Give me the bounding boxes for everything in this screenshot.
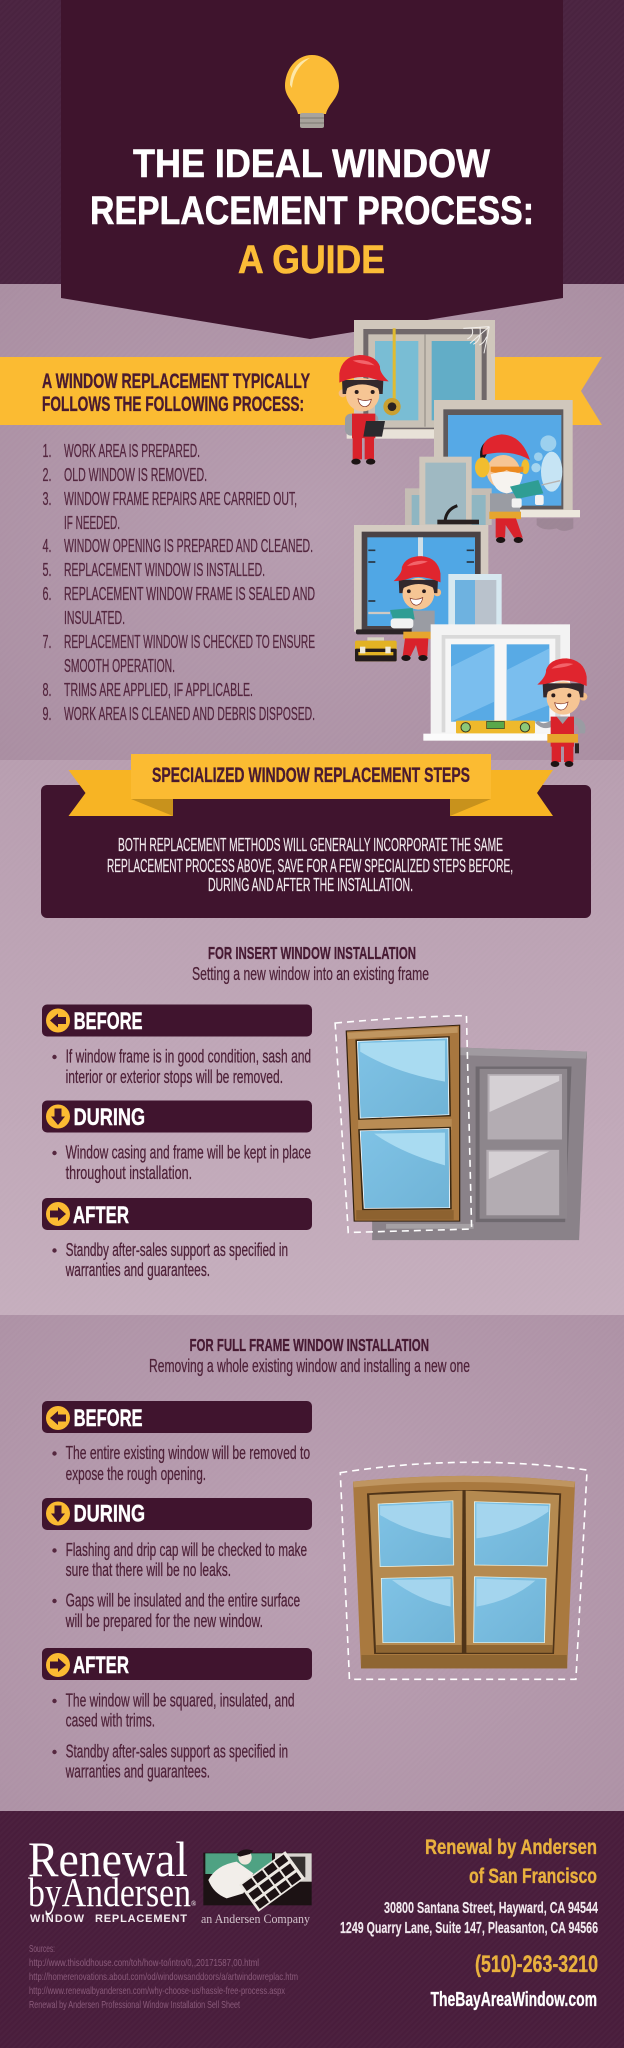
text block: numbered process list: REPLACEMENT WINDOW FRAME IS SEALED AND	[64, 584, 315, 604]
text block: sources	[29, 1943, 298, 2011]
logo: Renewal by Andersen wordmark: ®	[191, 1900, 197, 1908]
text block: full frame after bullets: Standby after-sales support as specified in	[66, 1742, 288, 1762]
text block: numbered process list: 6.	[42, 584, 52, 604]
window: translucent new sash	[448, 574, 502, 626]
heading: insert window installation: Setting a new window into an existing frame	[192, 964, 429, 984]
text block: full frame during bullets: will be prepared for the new window.	[65, 1611, 263, 1631]
illustration: windows and workers, upper group	[339, 320, 580, 543]
text block: full frame during bullets: sure that there will be no leaks.	[66, 1560, 231, 1580]
text block: full frame before bullet: expose the rough opening.	[66, 1464, 206, 1484]
text block: full frame after bullets: The window will be squared, insulated, and	[66, 1691, 295, 1711]
text block: sources: http://homerenovations.about.com/od/windowsanddoors/a/artwindowreplac.htm	[29, 1971, 298, 1983]
logo: man carrying window	[203, 1849, 312, 1912]
logo: Renewal by Andersen wordmark: byAndersen	[28, 1869, 191, 1915]
text block: numbered process list: REPLACEMENT WINDOW IS CHECKED TO ENSURE	[64, 632, 315, 652]
ribbon: specialized steps heading: SPECIALIZED WINDOW REPLACEMENT STEPS	[152, 764, 470, 787]
text block: insert during bullet	[52, 1142, 311, 1183]
window: grey existing frame	[372, 1048, 587, 1240]
text block: addresses	[340, 1900, 598, 1937]
icon: down arrow	[46, 1104, 70, 1128]
text block: full frame after bullets	[52, 1691, 295, 1782]
character: worker with goggles and drill	[475, 434, 560, 543]
ribbon heading: FOLLOWS THE FOLLOWING PROCESS:	[42, 393, 304, 416]
panel: insert during	[42, 1100, 312, 1132]
window: stacked spare frames	[405, 457, 492, 525]
text block: sources: http://www.renewalbyandersen.com/why-choose-us/hassle-free-process.aspx	[29, 1985, 286, 1997]
ribbon: specialized steps heading	[68, 754, 553, 816]
text block: full frame during bullets	[52, 1540, 307, 1631]
logo: Renewal by Andersen wordmark: Renewal	[28, 1831, 188, 1887]
logo: Renewal by Andersen wordmark: an Andersen Company	[201, 1911, 310, 1926]
panel: full frame during	[42, 1498, 312, 1530]
panel: specialized steps intro	[41, 754, 591, 918]
background: specialized steps section	[0, 760, 624, 1315]
logo: Renewal by Andersen wordmark: WINDOW	[30, 1913, 85, 1925]
text block: numbered process list: WINDOW FRAME REPAIRS ARE CARRIED OUT,	[64, 489, 297, 509]
title: THE IDEAL WINDOW	[133, 142, 490, 186]
text block: numbered process list: 7.	[42, 632, 52, 652]
window: old window with cobweb	[347, 320, 495, 439]
background: top band	[0, 0, 624, 284]
panel: full frame after: AFTER	[73, 1652, 129, 1679]
text block: numbered process list: INSULATED.	[64, 608, 125, 628]
title	[90, 142, 534, 282]
text block: insert after bullet: warranties and guarantees.	[65, 1260, 210, 1280]
character: worker drilling	[368, 556, 441, 661]
text block: numbered process list: 1.	[42, 441, 52, 461]
text block: numbered process list: REPLACEMENT WINDOW IS INSTALLED.	[64, 560, 265, 580]
text block: numbered process list: WINDOW OPENING IS PREPARED AND CLEANED.	[64, 536, 313, 556]
heading: insert window installation: FOR INSERT WINDOW INSTALLATION	[208, 943, 416, 963]
text block: full frame before bullet: The entire existing window will be removed to	[66, 1443, 310, 1463]
text block: insert during bullet: Window casing and frame will be kept in place	[66, 1142, 311, 1162]
illustration: full frame wooden window	[340, 1462, 587, 1679]
icon: right arrow	[46, 1202, 70, 1226]
character: worker with tablet and tape	[339, 355, 401, 465]
window: four glass panes	[378, 1501, 550, 1643]
text block: full frame before bullet	[52, 1443, 310, 1484]
panel: insert after	[42, 1198, 312, 1230]
text block: numbered process list: WORK AREA IS PREPARED.	[64, 441, 200, 461]
panel: title banner	[61, 0, 563, 339]
footer panel	[28, 1831, 598, 2011]
text block: numbered process list: 9.	[42, 704, 52, 724]
background: footer	[0, 1811, 624, 2048]
text block: numbered process list: 3.	[42, 489, 52, 509]
panel: full frame before	[42, 1401, 312, 1433]
icon: left arrow	[46, 1406, 70, 1430]
text block: sources: Sources:	[29, 1943, 55, 1955]
text block: sources: http://www.thisoldhouse.com/toh/how-to/intro/0,,20171587,00.html	[29, 1957, 259, 1969]
panel: full frame before: BEFORE	[74, 1405, 143, 1432]
text block: numbered process list: OLD WINDOW IS REMOVED.	[64, 465, 207, 485]
logo: Renewal by Andersen wordmark: REPLACEMENT	[95, 1913, 187, 1925]
window: finished white window	[423, 624, 570, 741]
window: prepared opening	[354, 525, 488, 634]
illustration: insert window being placed into grey frame	[335, 1016, 587, 1240]
text block: intro paragraph	[107, 835, 513, 895]
icon: left arrow	[46, 1008, 70, 1032]
text block: numbered process list: TRIMS ARE APPLIED, IF APPLICABLE.	[64, 680, 253, 700]
text block: company name	[425, 1836, 597, 1888]
background: full frame section	[0, 1315, 624, 1812]
title: A GUIDE	[238, 238, 385, 282]
panel: full frame during: DURING	[74, 1501, 145, 1528]
icon: toolbox	[355, 637, 397, 661]
text block: full frame after bullets: warranties and guarantees.	[65, 1762, 210, 1782]
text block: full frame after bullets: cased with trims.	[66, 1711, 155, 1731]
panel: insert after: AFTER	[73, 1202, 129, 1229]
illustration: windows and workers, lower group	[354, 525, 587, 767]
panel: insert during: DURING	[74, 1104, 145, 1131]
character: smiling worker with level	[535, 658, 587, 767]
text block: numbered process list: 8.	[42, 680, 52, 700]
text block: sources: Renewal by Andersen Professional Window Installation Sell Sheet	[29, 1999, 240, 2011]
ribbon heading: A WINDOW REPLACEMENT TYPICALLY	[42, 370, 310, 393]
heading: insert window installation	[192, 943, 429, 984]
panel: insert before: BEFORE	[74, 1008, 143, 1035]
window: wooden frame	[353, 1476, 575, 1668]
text block: full frame during bullets: Gaps will be insulated and the entire surface	[66, 1591, 300, 1611]
text block: numbered process list: 5.	[42, 560, 52, 580]
text block: numbered process list: 4.	[42, 536, 52, 556]
text block: insert during bullet: throughout installation.	[66, 1163, 192, 1183]
panel: insert before	[42, 1004, 312, 1036]
window: brown insert sash	[346, 1025, 460, 1221]
icon: light bulb	[285, 55, 339, 128]
icon: spirit level	[456, 721, 535, 733]
text block: insert before bullet: interior or exterior stops will be removed.	[66, 1067, 283, 1087]
window: drilling window with foam	[434, 400, 580, 531]
dashed selection outline	[340, 1462, 587, 1679]
icon: down arrow	[46, 1502, 70, 1526]
text block: insert after bullet	[52, 1240, 288, 1280]
heading: full frame window installation	[149, 1335, 470, 1376]
title: REPLACEMENT PROCESS:	[90, 189, 534, 233]
text block: numbered process list: IF NEEDED.	[64, 513, 120, 533]
text block: full frame during bullets: Flashing and drip cap will be checked to make	[66, 1540, 307, 1560]
logo: Renewal by Andersen wordmark	[28, 1831, 310, 1926]
dashed selection outline	[335, 1016, 472, 1232]
ribbon heading	[42, 370, 310, 416]
text block: numbered process list: 2.	[42, 465, 52, 485]
background: process section	[0, 284, 624, 760]
text block: insert before bullet: If window frame is in good condition, sash and	[66, 1046, 311, 1066]
panel: full frame after	[42, 1648, 312, 1680]
text block: numbered process list	[42, 441, 315, 724]
heading: full frame window installation: Removing a whole existing window and installing a new one	[149, 1356, 470, 1376]
text block: insert after bullet: Standby after-sales support as specified in	[66, 1240, 288, 1260]
text block: intro paragraph: DURING AND AFTER THE INSTALLATION.	[208, 875, 413, 895]
panel: yellow intro ribbon	[0, 357, 602, 425]
text block: numbered process list: WORK AREA IS CLEANED AND DEBRIS DISPOSED.	[64, 704, 315, 724]
text block: numbered process list: SMOOTH OPERATION.	[64, 656, 175, 676]
text block: insert before bullet	[52, 1046, 311, 1087]
heading: full frame window installation: FOR FULL FRAME WINDOW INSTALLATION	[190, 1335, 429, 1355]
icon: right arrow	[46, 1653, 70, 1677]
